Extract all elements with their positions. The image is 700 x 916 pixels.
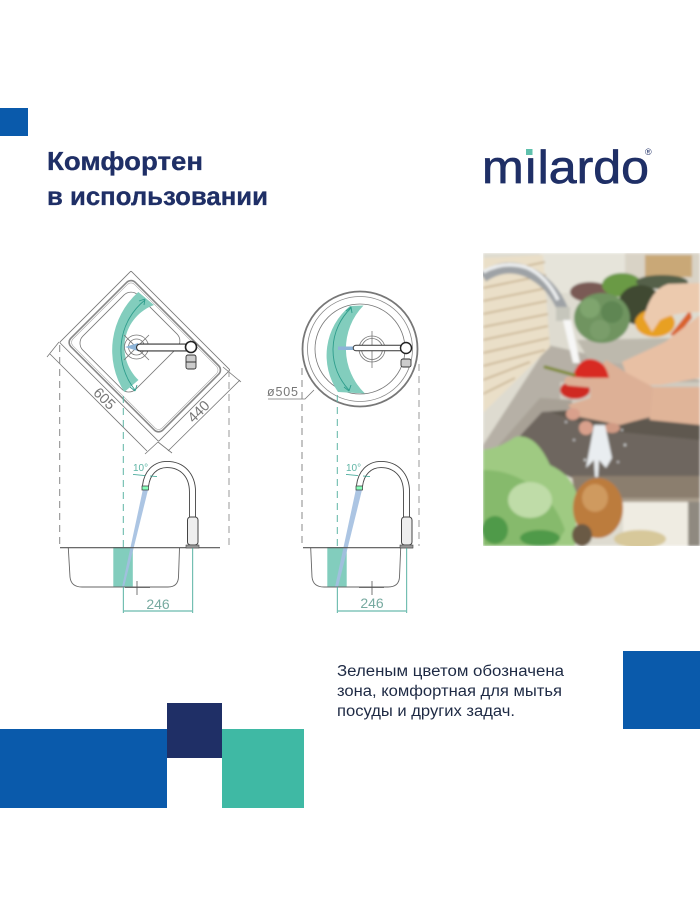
rotation arrow — [333, 307, 352, 391]
comfort zone arc — [327, 306, 365, 394]
dimension 505 — [267, 385, 314, 399]
faucet — [483, 268, 563, 310]
diagram: side view right — [303, 463, 413, 613]
hands — [568, 360, 653, 425]
projection lines — [60, 345, 229, 586]
faucet top view — [356, 342, 412, 367]
diagram: square sink top view: 440 — [185, 398, 213, 426]
pepper — [545, 359, 609, 399]
comfort zone — [327, 547, 347, 587]
faucet — [356, 464, 413, 548]
counter — [483, 345, 700, 451]
bowl — [68, 548, 180, 587]
upper hand and arm — [644, 283, 700, 332]
sink — [510, 408, 700, 478]
faucet top view — [140, 342, 196, 369]
bowl — [577, 338, 670, 364]
water stream — [122, 489, 148, 587]
drain — [124, 335, 149, 360]
dimension 246: 246 — [146, 596, 170, 612]
angle label: 10° — [133, 463, 148, 474]
comfort zone arc — [112, 292, 154, 392]
counter — [303, 547, 413, 549]
diagram: square sink top view — [47, 271, 241, 586]
dimension 440 — [158, 367, 241, 453]
logo: milardo: ® — [645, 147, 652, 157]
body text: зона, комфортная для мытья — [337, 683, 562, 700]
comfort zone — [113, 547, 133, 587]
greens behind — [570, 282, 610, 302]
angle label: 10° — [346, 463, 361, 474]
orange fruit — [635, 309, 675, 337]
water — [563, 320, 580, 363]
dimension 505: ø505 — [267, 385, 298, 399]
faucet — [142, 464, 199, 548]
title: Комфортен — [47, 146, 203, 176]
bowl — [311, 548, 401, 587]
body text: Зеленым цветом обозначена — [337, 663, 564, 680]
broccoli — [574, 293, 630, 343]
diagram: square sink top view: 605 — [90, 385, 118, 413]
diagram: side view left — [60, 463, 220, 613]
drain — [354, 331, 391, 368]
dimension 246: 246 — [360, 595, 384, 611]
drain — [359, 581, 384, 595]
angle label — [133, 463, 157, 476]
dimension 246 — [337, 548, 407, 613]
blinds — [483, 255, 550, 413]
rotation arrow — [121, 299, 145, 391]
potato — [614, 530, 666, 548]
body text: посуды и других задач. — [337, 703, 515, 720]
water stream — [335, 489, 362, 587]
counter — [60, 547, 220, 549]
title: в использовании — [47, 181, 268, 211]
finger over pepper — [569, 381, 612, 385]
angle label — [346, 463, 370, 476]
decorative blocks: bottom left — [0, 703, 304, 808]
projection lines — [302, 364, 419, 586]
tray — [623, 500, 689, 546]
logo: milardo: mılardo — [482, 141, 649, 193]
diagram: round sink top view — [267, 292, 419, 586]
sink outline rotated — [60, 271, 230, 441]
dimension 246 — [123, 548, 193, 613]
decorative block: right blue — [623, 651, 700, 729]
lower arm — [645, 387, 700, 425]
photo: washing vegetables at the kitchen sink — [482, 253, 700, 548]
lettuce — [483, 436, 577, 546]
dimension 605 — [47, 342, 158, 454]
onion — [573, 478, 623, 538]
drain — [125, 581, 150, 595]
decorative square: top left — [0, 108, 28, 136]
